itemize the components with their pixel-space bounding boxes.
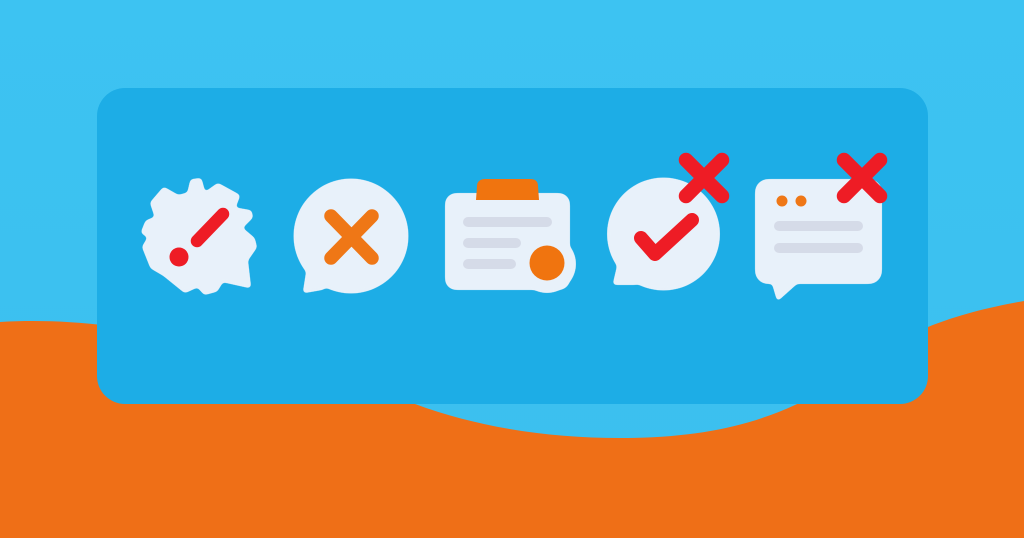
icon: speech bubble with check and red X [607, 160, 722, 290]
icon: card with tab and badge [445, 179, 576, 293]
icon: gear with alert slash [143, 180, 255, 293]
alert dot [170, 248, 188, 266]
orange badge [530, 246, 564, 280]
text lines [774, 221, 863, 231]
panel: blue card [97, 88, 928, 404]
red X badge [686, 160, 722, 196]
alert slash [197, 214, 223, 241]
orange X [331, 216, 372, 258]
red X badge [844, 160, 880, 196]
card body [445, 193, 576, 293]
red check [641, 220, 692, 254]
icon: rectangular chat bubble with red X [755, 160, 882, 299]
icon: speech bubble with orange X [294, 178, 408, 294]
background: orange wave [0, 301, 1024, 538]
text lines [463, 217, 552, 227]
orange tab [476, 179, 539, 200]
orange dots [776, 196, 788, 206]
